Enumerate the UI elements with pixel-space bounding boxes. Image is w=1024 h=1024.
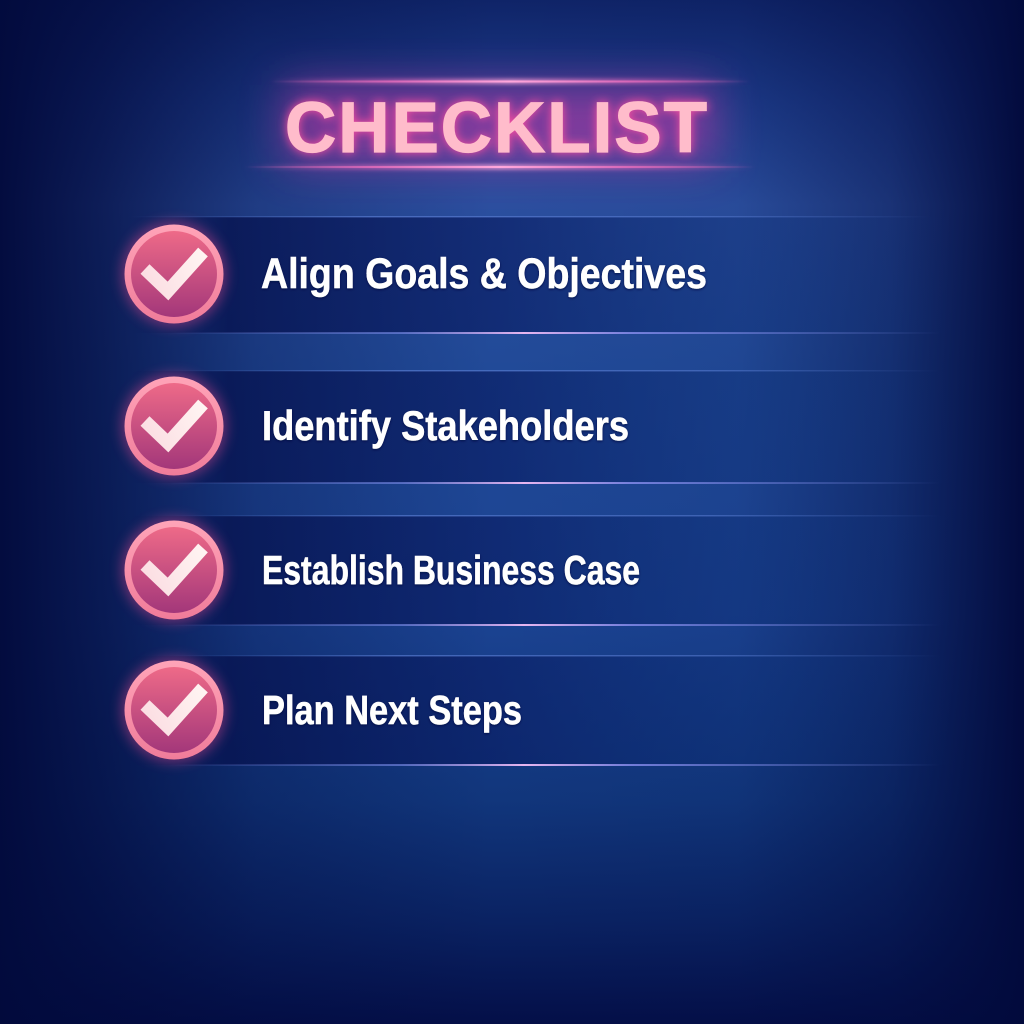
row 2: Identify Stakeholders: Identify Stakeholders [262,402,629,449]
title text: CHECKLIST [285,89,707,168]
row 3: Establish Business Case [121,515,950,626]
row 3: Establish Business Case: Establish Business Case [262,547,640,593]
row 2: Identify Stakeholders [121,370,950,484]
row 4: Plan Next Steps: Plan Next Steps [262,687,522,733]
row 4: Plan Next Steps [121,655,950,766]
row 1: Align Goals & Objectives [121,216,950,334]
row 1: Align Goals & Objectives: Align Goals & Objectives [261,250,707,298]
title block: CHECKLIST [285,89,707,168]
